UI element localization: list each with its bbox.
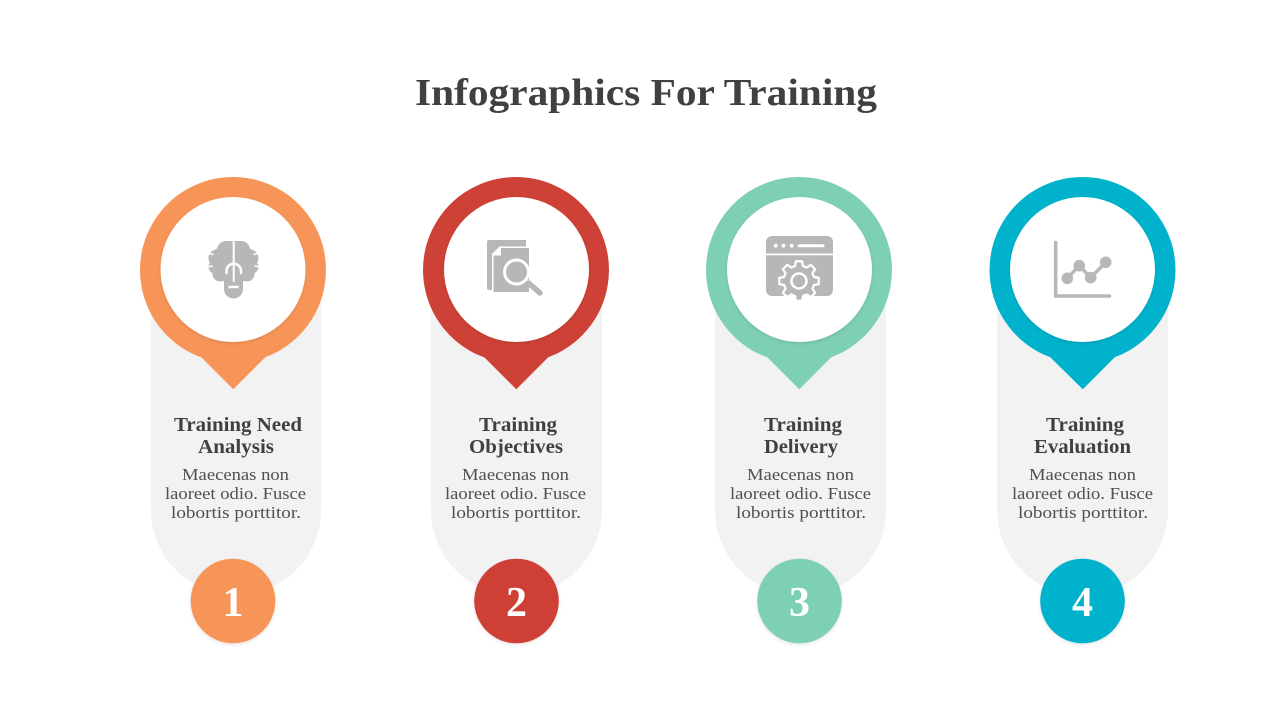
heading: Delivery [764,436,838,458]
number badge 2: 2 [506,580,527,626]
description: Maecenas non [182,465,290,484]
heading: Training Need [174,414,302,436]
title: Infographics For Training [415,72,877,114]
icon: line chart [1056,242,1111,296]
heading: Evaluation [1034,436,1131,458]
description: lobortis porttitor. [171,503,301,522]
heading [174,414,302,458]
number badge 4 [1040,559,1125,643]
pin marker [423,177,609,389]
description: Maecenas non [1029,465,1137,484]
icon: browser settings gear [766,236,833,301]
description: lobortis porttitor. [1018,503,1148,522]
description: Maecenas non [462,465,570,484]
card background [715,270,886,596]
description: Maecenas non [747,465,855,484]
description: laoreet odio. Fusce [1012,484,1153,503]
description: laoreet odio. Fusce [165,484,306,503]
heading: Training [764,414,842,436]
number badge 1: 1 [222,580,244,626]
description [1012,465,1153,522]
description [165,465,306,522]
icon: document magnifier [487,240,540,293]
pin marker [140,177,326,389]
heading [1034,414,1131,458]
heading: Objectives [469,436,563,458]
heading: Training [479,414,557,436]
heading: Training [1046,414,1124,436]
panel: step 2 training objectives [423,177,609,643]
description: lobortis porttitor. [451,503,581,522]
number badge 4: 4 [1072,580,1093,626]
pin marker [706,177,892,389]
number badge 3: 3 [789,580,810,626]
number badge 1 [191,559,275,643]
card background [431,270,602,596]
description: laoreet odio. Fusce [730,484,871,503]
description [730,465,871,522]
description: laoreet odio. Fusce [445,484,586,503]
card background [997,270,1168,596]
description: lobortis porttitor. [736,503,866,522]
heading [764,414,842,458]
pin marker [990,177,1176,389]
heading [469,414,563,458]
panel: step 1 training need analysis [140,177,326,643]
panel: step 4 training evaluation [990,177,1176,643]
number badge 2 [474,559,559,643]
description [445,465,586,522]
icon: brain light bulb [208,240,259,298]
number badge 3 [757,559,842,643]
card background [151,270,321,595]
heading: Analysis [198,436,274,458]
panel: step 3 training delivery [706,177,892,643]
